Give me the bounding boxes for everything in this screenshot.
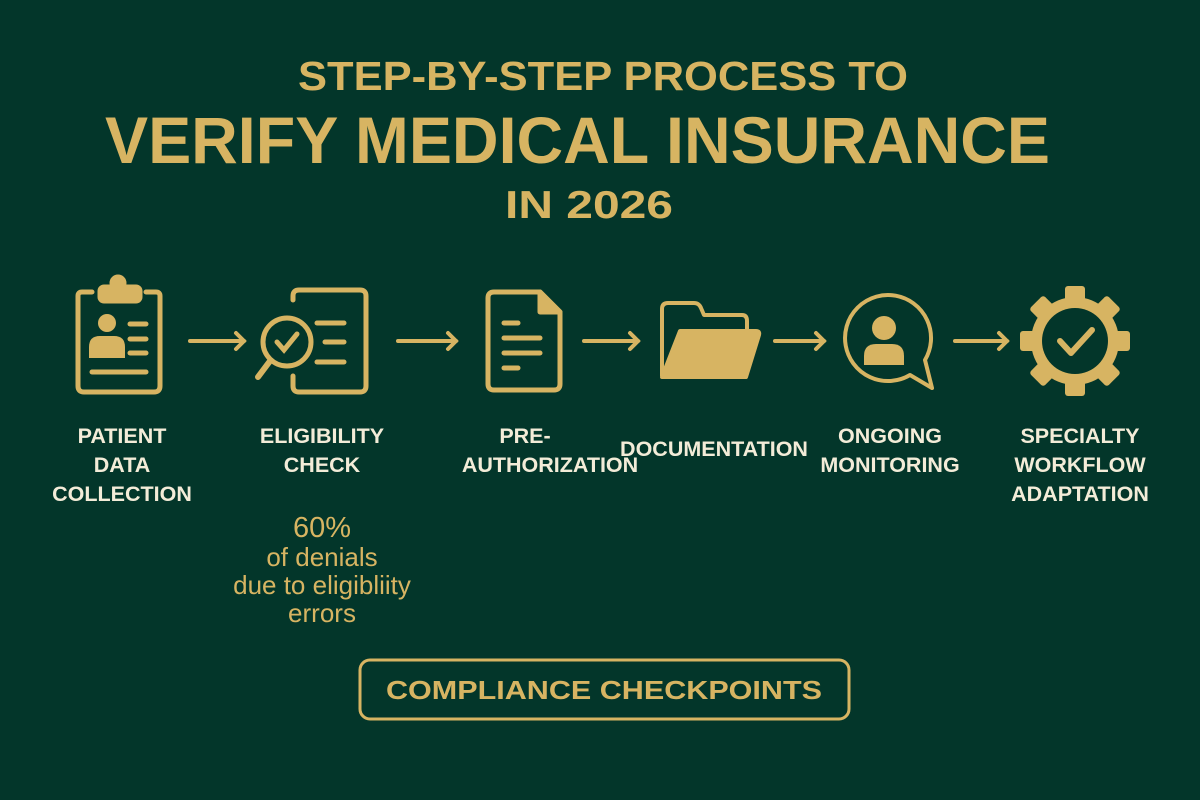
title xyxy=(105,53,1050,227)
step labels: ONGOING xyxy=(838,424,942,448)
step labels: DATA xyxy=(94,453,150,477)
icon: eligibility check xyxy=(258,290,366,392)
step labels: SPECIALTY xyxy=(1020,424,1140,448)
title: IN 2026 xyxy=(505,184,673,227)
step labels: DOCUMENTATION xyxy=(620,437,808,461)
title: STEP-BY-STEP PROCESS TO xyxy=(298,53,908,99)
stat callout: due to eligibliity xyxy=(233,570,411,600)
icon: person speech bubble xyxy=(845,295,932,388)
step labels: CHECK xyxy=(284,453,361,477)
step labels: MONITORING xyxy=(820,453,960,477)
step labels: ADAPTATION xyxy=(1011,482,1149,506)
arrow 5 xyxy=(955,333,1007,349)
arrow 2 xyxy=(398,333,456,349)
stat callout: errors xyxy=(288,598,356,628)
compliance checkpoints button: COMPLIANCE CHECKPOINTS xyxy=(386,675,822,705)
stat callout xyxy=(233,512,411,628)
step labels xyxy=(52,424,1149,506)
step labels: AUTHORIZATION xyxy=(462,453,638,477)
title: VERIFY MEDICAL INSURANCE xyxy=(105,103,1050,177)
step labels: PRE- xyxy=(499,424,551,448)
arrow 3 xyxy=(584,333,638,349)
arrow 4 xyxy=(775,333,824,349)
icon: folder xyxy=(662,303,759,377)
step labels: WORKFLOW xyxy=(1014,453,1146,477)
stat callout: of denials xyxy=(266,542,378,572)
icon: document xyxy=(488,292,560,390)
compliance checkpoints button xyxy=(360,660,849,719)
stat callout: 60% xyxy=(293,512,351,544)
step labels: PATIENT xyxy=(78,424,166,448)
icon: gear with check xyxy=(1020,286,1130,396)
icon: clipboard xyxy=(78,277,160,392)
step labels: ELIGIBILITY xyxy=(260,424,384,448)
step labels: COLLECTION xyxy=(52,482,192,506)
arrow 1 xyxy=(190,333,244,349)
